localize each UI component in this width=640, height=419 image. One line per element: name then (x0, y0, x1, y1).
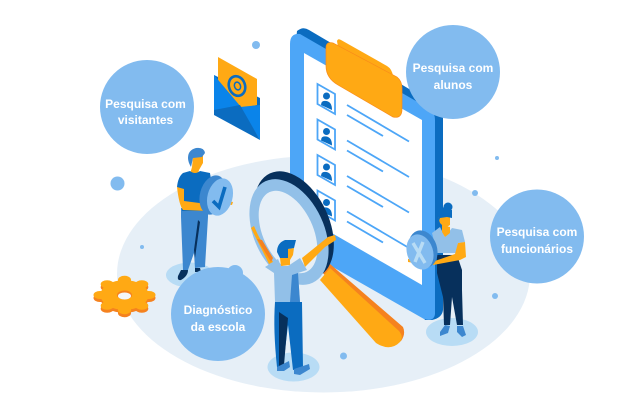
decorative dots (110, 41, 499, 360)
person: woman with x badge (402, 202, 478, 346)
arms (251, 226, 273, 264)
legs (437, 255, 463, 325)
clipboard board (290, 34, 435, 320)
magnifier rim (238, 159, 350, 291)
callout: Pesquisa com alunos: alunos (434, 78, 473, 92)
legs (181, 208, 208, 270)
torso (432, 227, 465, 253)
callout: Pesquisa com visitantes (100, 60, 194, 154)
check badge (195, 172, 237, 219)
x badge (402, 227, 442, 273)
row 3 (318, 155, 409, 212)
magnifying glass (234, 159, 404, 347)
shoes (178, 270, 188, 280)
callout: Pesquisa com funcionários: Pesquisa com (497, 225, 577, 239)
face and neck (280, 248, 294, 266)
shoes (277, 361, 290, 371)
floor shadow (268, 352, 320, 382)
row 2 (318, 120, 409, 177)
floor shadow (166, 262, 214, 288)
row 1 (318, 84, 409, 142)
person: man holding magnifier (251, 226, 336, 382)
background ellipse (117, 156, 530, 392)
arm (432, 242, 466, 265)
row 4 (318, 190, 409, 248)
callout: Diagnóstico da escola: Diagnóstico (184, 303, 252, 317)
magnifier handle (320, 264, 404, 347)
icon: gear (94, 276, 156, 317)
legs (274, 302, 303, 370)
callout: Pesquisa com alunos: Pesquisa com (413, 61, 493, 75)
neck and face (190, 156, 203, 174)
callout: Diagnóstico da escola: da escola (191, 320, 246, 334)
neck (442, 225, 450, 237)
callout: Pesquisa com visitantes: Pesquisa com (105, 97, 186, 111)
floor shadow (426, 318, 478, 346)
clipboard clip (326, 39, 402, 117)
callout: Pesquisa com funcionários (490, 190, 584, 284)
arm (177, 187, 210, 211)
shoes (440, 325, 450, 336)
callout: Pesquisa com alunos (406, 25, 500, 119)
icon: email envelope (214, 57, 260, 140)
clipboard paper (304, 53, 422, 285)
torso (265, 258, 307, 302)
callout: Diagnóstico da escola (171, 265, 265, 361)
person: man with check badge (166, 148, 237, 288)
hair (188, 148, 205, 167)
hair (437, 202, 452, 221)
callout: Pesquisa com visitantes: visitantes (118, 113, 174, 127)
face (438, 217, 450, 228)
clipboard (290, 28, 443, 320)
clipboard back edge (290, 28, 443, 320)
hair (277, 240, 296, 258)
torso (177, 171, 212, 211)
callout: Pesquisa com funcionários: funcionários (501, 242, 573, 256)
